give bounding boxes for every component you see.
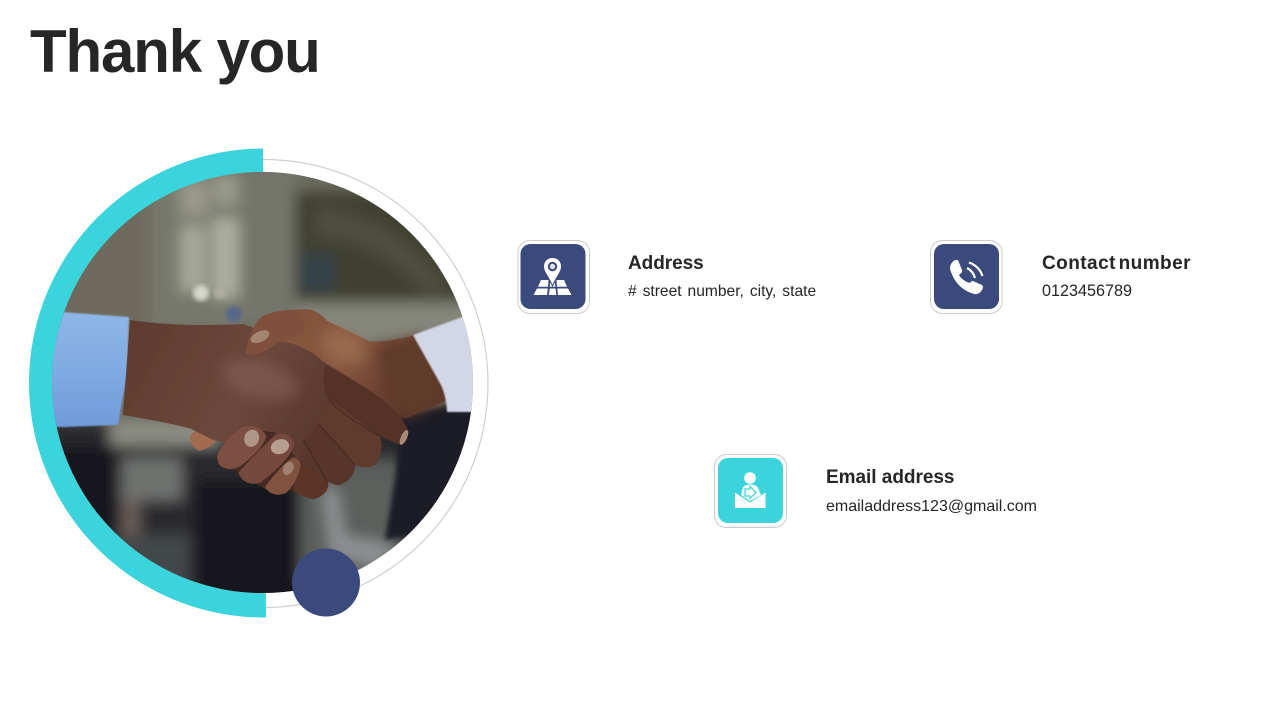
left hand and arm — [123, 320, 408, 499]
icon: map pin — [518, 240, 590, 314]
text: email: emailaddress123@gmail.com — [826, 498, 1037, 515]
right thumb shine — [246, 310, 286, 355]
right wrist shade — [377, 333, 447, 418]
white cuff — [413, 316, 476, 412]
icon: phone — [930, 240, 1002, 314]
back-of-hand highlight — [224, 360, 298, 402]
finger creases — [303, 398, 380, 480]
lower finger tip behind — [190, 429, 217, 451]
heading: address: Address — [628, 253, 704, 274]
dark suit — [385, 405, 480, 540]
right fingers — [219, 429, 264, 467]
right hand — [246, 309, 447, 418]
text: phone number: 0123456789 — [1042, 282, 1132, 300]
panel: address — [518, 240, 816, 314]
heading: contact number: Contact number — [1042, 253, 1191, 274]
photo circle with accent rings — [29, 148, 489, 618]
panel: contact number — [930, 240, 1191, 314]
heading: email address: Email address — [826, 467, 954, 488]
thin outer ring — [40, 160, 488, 608]
ring finger — [305, 438, 355, 485]
title: Thank you — [30, 18, 320, 85]
clasped hands — [123, 309, 447, 499]
text: street: # street number, city, state — [628, 283, 816, 300]
fingernails — [250, 330, 270, 344]
middle finger — [328, 408, 382, 467]
icon: email — [714, 454, 787, 528]
panel: email address — [714, 454, 1037, 528]
finger backing — [233, 430, 295, 490]
highlight dots — [193, 285, 209, 301]
thumb of left hand — [324, 365, 408, 445]
navy circle — [292, 548, 360, 616]
blue sleeve — [48, 311, 129, 427]
handshake photo — [52, 172, 473, 593]
teal arc — [29, 148, 266, 618]
little finger — [294, 480, 327, 499]
